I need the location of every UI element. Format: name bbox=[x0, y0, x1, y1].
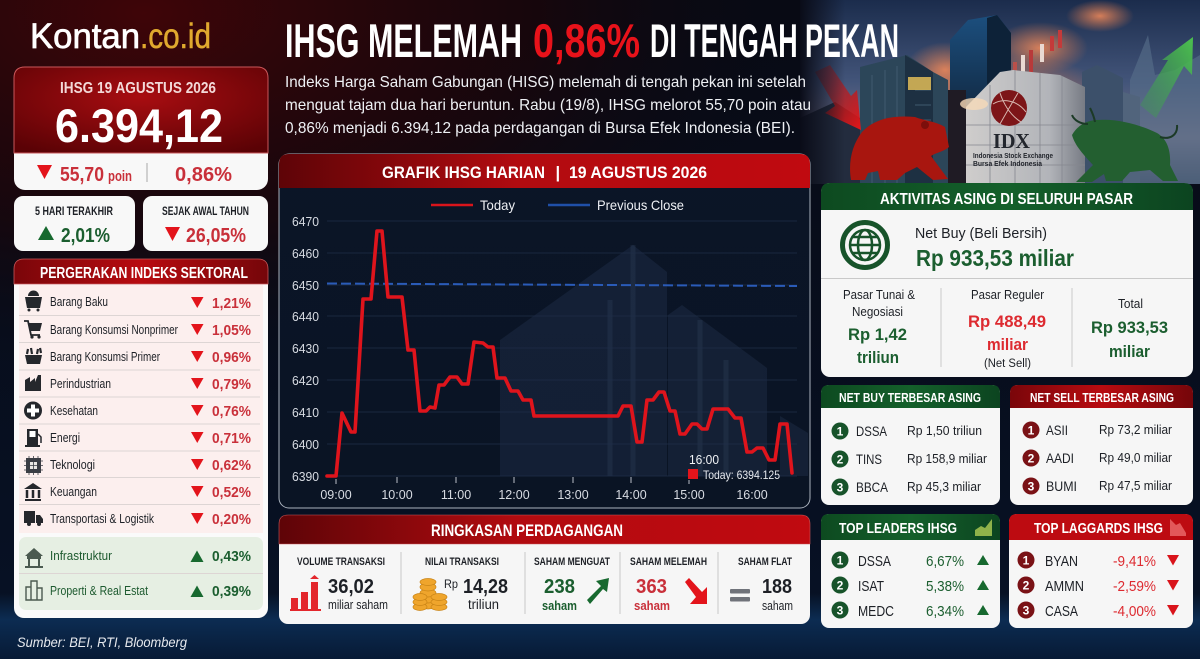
row 1: DSSA: DSSA bbox=[856, 423, 888, 439]
pasar tunai dan negosiasi: Rp 1,42 bbox=[848, 325, 907, 344]
row 1: ASII bbox=[1022, 422, 1173, 438]
saham menguat bbox=[534, 556, 610, 613]
row 1: DSSA: 1 bbox=[837, 424, 844, 438]
tower bbox=[950, 15, 1011, 130]
IDX globe bbox=[991, 90, 1027, 126]
chart tooltip bbox=[688, 452, 780, 482]
row 3: BBCA: Rp 45,3 miliar bbox=[907, 479, 982, 494]
title bbox=[285, 14, 899, 67]
row 3: CASA: 3 bbox=[1023, 604, 1030, 618]
pasar reguler: miliar bbox=[987, 335, 1028, 354]
saham flat bbox=[730, 556, 793, 613]
saham melemah bbox=[630, 556, 707, 613]
bear bbox=[850, 116, 949, 180]
x axis: 10:00 bbox=[381, 488, 413, 502]
row 3: BUMI: BUMI bbox=[1046, 478, 1077, 494]
row 2: TINS: Rp 158,9 miliar bbox=[907, 451, 988, 466]
IDX wordmark: Indonesia Stock Exchange bbox=[973, 151, 1053, 160]
total bbox=[1091, 297, 1168, 361]
nilai transaksi bbox=[413, 556, 508, 612]
icon: rising chart bbox=[975, 519, 992, 536]
row: keuangan bbox=[24, 483, 251, 501]
row: kesehatan bbox=[24, 402, 251, 420]
row 1: DSSA bbox=[832, 552, 989, 570]
row: teknologi: Teknologi bbox=[50, 458, 95, 472]
row: barang konsumsi nonprimer: 1,05% bbox=[212, 323, 251, 339]
row: perindustrian bbox=[25, 375, 251, 393]
panel: net buy terbesar asing bbox=[821, 385, 1000, 505]
volume transaksi: 36,02 bbox=[328, 576, 374, 598]
chart tooltip: 16:00 bbox=[689, 452, 719, 467]
row 1: BYAN: 1 bbox=[1023, 554, 1030, 568]
row: perindustrian: 0,79% bbox=[212, 377, 251, 393]
row 2: ISAT bbox=[832, 576, 989, 595]
panel: top laggards IHSG: TOP LAGGARDS IHSG bbox=[1034, 521, 1163, 537]
intro paragraph: 0,86% menjadi 6.394,12 pada perdagangan di Bursa Efek Indonesia (BEI). bbox=[285, 120, 795, 137]
panel: sejak awal tahun: 26,05% bbox=[186, 225, 246, 247]
net buy headline: Rp 933,53 miliar bbox=[916, 245, 1074, 271]
row 3: MEDC bbox=[832, 602, 989, 620]
row 2: AMMN: -2,59% bbox=[1113, 578, 1156, 595]
row: kesehatan: Kesehatan bbox=[50, 404, 98, 418]
pasar tunai dan negosiasi: Negosiasi bbox=[852, 305, 903, 319]
volume transaksi bbox=[290, 556, 388, 612]
title: DI TENGAH PEKAN bbox=[650, 14, 899, 67]
saham flat: saham bbox=[762, 598, 793, 613]
nilai transaksi: Rp bbox=[444, 579, 458, 591]
pasar tunai dan negosiasi: triliun bbox=[857, 348, 899, 367]
saham melemah: SAHAM MELEMAH bbox=[630, 556, 707, 568]
panel: sejak awal tahun: SEJAK AWAL TAHUN bbox=[162, 206, 249, 218]
pasar tunai dan negosiasi: Pasar Tunai & bbox=[843, 288, 916, 302]
previous close line bbox=[327, 284, 797, 286]
chart heading: | bbox=[556, 164, 560, 182]
today line bbox=[327, 231, 792, 476]
net buy headline bbox=[915, 225, 1074, 271]
row: teknologi: 0,62% bbox=[212, 458, 251, 474]
row 3: CASA: -4,00% bbox=[1113, 603, 1156, 620]
panel: top laggards IHSG bbox=[1009, 514, 1193, 628]
pasar reguler bbox=[968, 288, 1046, 370]
summary heading: RINGKASAN PERDAGANGAN bbox=[431, 521, 623, 540]
title: IHSG MELEMAH bbox=[285, 14, 522, 67]
row: transportasi dan logistik: Transportasi & Logistik bbox=[50, 512, 155, 526]
change in percent: 0,86% bbox=[175, 163, 232, 186]
x axis: 13:00 bbox=[557, 488, 589, 502]
saham flat: 188 bbox=[762, 576, 792, 598]
y axis and grid: 6430 bbox=[292, 341, 319, 356]
total: miliar bbox=[1109, 342, 1150, 361]
row 1: DSSA: Rp 1,50 triliun bbox=[907, 423, 982, 438]
row 2: AADI bbox=[1022, 450, 1173, 466]
row: barang konsumsi primer: Barang Konsumsi Primer bbox=[50, 350, 160, 364]
x axis: 16:00 bbox=[736, 488, 768, 502]
panel: top leaders IHSG bbox=[821, 514, 1000, 628]
row 1: DSSA: 1 bbox=[837, 554, 844, 568]
y axis and grid: 6450 bbox=[292, 278, 319, 293]
y axis and grid: 6420 bbox=[292, 373, 319, 388]
row: barang baku: Barang Baku bbox=[50, 295, 108, 309]
row 2: ISAT: 2 bbox=[837, 578, 844, 592]
index value: 6.394,12 bbox=[55, 99, 223, 152]
row: barang konsumsi primer bbox=[25, 348, 251, 366]
row: barang baku bbox=[25, 290, 251, 312]
intro paragraph: menguat tajam dua hari beruntun. Rabu (19/8), IHSG melorot 55,70 poin atau bbox=[285, 97, 811, 114]
row 2: ISAT: ISAT bbox=[858, 578, 884, 595]
saham melemah: 363 bbox=[636, 576, 667, 598]
panel: pergerakan indeks sektoral bbox=[14, 259, 268, 618]
row 1: BYAN bbox=[1018, 552, 1179, 570]
nilai transaksi: 14,28 bbox=[463, 576, 508, 598]
row: transportasi dan logistik bbox=[24, 511, 251, 528]
row 3: BBCA: 3 bbox=[837, 480, 844, 494]
candlesticks bbox=[1013, 30, 1062, 76]
left buildings bbox=[860, 55, 948, 184]
logo: Kontan.co.id: Kontan bbox=[30, 17, 140, 56]
watermark building bbox=[500, 245, 808, 476]
chart tooltip: Today: 6394.125 bbox=[703, 468, 780, 482]
row: infrastruktur: 0,43% bbox=[212, 549, 251, 565]
right building bbox=[1082, 65, 1123, 184]
row: properti dan real estat bbox=[26, 581, 251, 600]
row 1: DSSA: 6,67% bbox=[926, 553, 964, 570]
row: barang konsumsi nonprimer: Barang Konsumsi Nonprimer bbox=[50, 323, 178, 337]
chart heading bbox=[382, 164, 707, 182]
foreign heading: AKTIVITAS ASING DI SELURUH PASAR bbox=[880, 191, 1133, 208]
chart legend: Previous Close bbox=[597, 197, 684, 213]
row 2: TINS: TINS bbox=[856, 451, 882, 467]
row: barang konsumsi primer: 0,96% bbox=[212, 350, 251, 366]
row 2: TINS: 2 bbox=[837, 452, 844, 466]
y axis and grid bbox=[292, 214, 797, 484]
green up arrow bbox=[1140, 37, 1193, 118]
row 2: AMMN bbox=[1018, 576, 1179, 595]
row 3: MEDC: 3 bbox=[837, 604, 844, 618]
y axis and grid: 6390 bbox=[292, 469, 319, 484]
nilai transaksi: NILAI TRANSAKSI bbox=[425, 556, 499, 568]
row 2: AADI: Rp 49,0 miliar bbox=[1099, 450, 1173, 465]
saham flat: SAHAM FLAT bbox=[738, 556, 792, 568]
chart heading: GRAFIK IHSG HARIAN bbox=[382, 164, 545, 182]
red down arrow bbox=[815, 65, 861, 130]
row 2: AMMN: AMMN bbox=[1045, 578, 1084, 595]
volume transaksi: VOLUME TRANSAKSI bbox=[297, 556, 385, 568]
icon: globe bbox=[842, 222, 888, 268]
row 3: BUMI: 3 bbox=[1028, 480, 1035, 494]
total: Total bbox=[1118, 297, 1143, 311]
IDX wordmark: IDX bbox=[993, 129, 1030, 153]
change in points: 55,70 bbox=[60, 163, 104, 186]
x axis: 09:00 bbox=[320, 488, 352, 502]
row: properti dan real estat: Properti & Real Estat bbox=[50, 584, 148, 598]
row 3: MEDC: MEDC bbox=[858, 603, 894, 620]
row 1: ASII: ASII bbox=[1046, 422, 1068, 438]
panel: aktivitas asing di seluruh pasar bbox=[821, 183, 1193, 377]
row 2: TINS bbox=[832, 450, 988, 468]
row: keuangan: Keuangan bbox=[50, 485, 97, 499]
change in points: poin bbox=[108, 168, 132, 185]
row: keuangan: 0,52% bbox=[212, 485, 251, 501]
source note: Sumber: BEI, RTI, Bloomberg bbox=[17, 634, 187, 650]
panel: top leaders IHSG: TOP LEADERS IHSG bbox=[839, 521, 957, 537]
panel: net sell terbesar asing bbox=[1010, 385, 1193, 505]
saham melemah: saham bbox=[634, 598, 670, 613]
row 2: AADI: AADI bbox=[1046, 450, 1074, 466]
saham menguat: SAHAM MENGUAT bbox=[534, 556, 610, 568]
row 3: CASA bbox=[1018, 602, 1179, 620]
IDX building bbox=[966, 70, 1085, 184]
panel: 5 hari terakhir: 5 HARI TERAKHIR bbox=[35, 206, 114, 218]
row: transportasi dan logistik: 0,20% bbox=[212, 512, 251, 528]
chart legend bbox=[431, 197, 684, 213]
row 2: AMMN: 2 bbox=[1023, 578, 1030, 592]
pasar reguler: Pasar Reguler bbox=[971, 288, 1044, 302]
row: teknologi bbox=[24, 456, 251, 475]
intro paragraph: Indeks Harga Saham Gabungan (HISG) melemah di tengah pekan ini setelah bbox=[285, 74, 806, 91]
panel: grafik IHSG harian bbox=[279, 154, 810, 508]
net buy headline: Net Buy (Beli Bersih) bbox=[915, 225, 1047, 242]
panel heading: PERGERAKAN INDEKS SEKTORAL bbox=[40, 265, 248, 282]
total: Rp 933,53 bbox=[1091, 318, 1168, 337]
x axis: 12:00 bbox=[498, 488, 530, 502]
icon: falling chart bbox=[1170, 519, 1186, 536]
volume transaksi: miliar saham bbox=[328, 598, 388, 612]
panel: 5 hari terakhir: 2,01% bbox=[61, 225, 110, 247]
intro paragraph bbox=[285, 74, 811, 137]
IDX wordmark: Bursa Efek Indonesia bbox=[973, 159, 1043, 168]
card heading: IHSG 19 AGUSTUS 2026 bbox=[60, 80, 216, 97]
saham menguat: 238 bbox=[544, 576, 575, 598]
row 3: CASA: CASA bbox=[1045, 603, 1078, 620]
row 1: ASII: 1 bbox=[1028, 424, 1035, 438]
y axis and grid: 6410 bbox=[292, 405, 319, 420]
row 1: BYAN: -9,41% bbox=[1113, 553, 1156, 570]
panel: net buy terbesar asing: NET BUY TERBESAR ASING bbox=[839, 390, 981, 405]
row 3: MEDC: 6,34% bbox=[926, 603, 964, 620]
IDX wordmark bbox=[973, 129, 1053, 168]
row 2: ISAT: 5,38% bbox=[926, 578, 964, 595]
pasar reguler: (Net Sell) bbox=[984, 358, 1031, 370]
panel: ringkasan perdagangan bbox=[279, 515, 810, 624]
row 3: BBCA: BBCA bbox=[856, 479, 889, 495]
chart legend: Today bbox=[480, 197, 515, 213]
row 1: DSSA bbox=[832, 422, 982, 440]
row 3: BUMI: Rp 47,5 miliar bbox=[1099, 478, 1173, 493]
panel: sejak awal tahun bbox=[143, 196, 268, 251]
row: energi: 0,71% bbox=[212, 431, 251, 447]
row: infrastruktur: Infrastruktur bbox=[50, 549, 112, 563]
pasar tunai dan negosiasi bbox=[843, 288, 916, 367]
hero illustration: IDX building, bear and bull bbox=[800, 0, 1200, 184]
pasar reguler: Rp 488,49 bbox=[968, 312, 1046, 331]
x axis: 15:00 bbox=[673, 488, 705, 502]
row 1: BYAN: BYAN bbox=[1045, 553, 1078, 570]
y axis and grid: 6460 bbox=[292, 246, 319, 261]
chart heading: 19 AGUSTUS 2026 bbox=[569, 164, 707, 182]
row: properti dan real estat: 0,39% bbox=[212, 584, 251, 600]
row: infrastruktur bbox=[25, 548, 251, 567]
x axis: 14:00 bbox=[615, 488, 647, 502]
x axis: 11:00 bbox=[441, 488, 471, 502]
nilai transaksi: triliun bbox=[468, 597, 499, 612]
row 2: AADI: 2 bbox=[1028, 452, 1035, 466]
y axis and grid: 6440 bbox=[292, 309, 319, 324]
x axis bbox=[320, 477, 768, 502]
logo: Kontan.co.id: .co.id bbox=[140, 17, 211, 56]
logo: Kontan.co.id bbox=[30, 17, 211, 56]
row: kesehatan: 0,76% bbox=[212, 404, 251, 420]
row 3: BBCA bbox=[832, 478, 982, 496]
row 1: DSSA: DSSA bbox=[858, 553, 891, 570]
saham menguat: saham bbox=[542, 598, 577, 613]
row: perindustrian: Perindustrian bbox=[50, 377, 111, 391]
row 3: BUMI bbox=[1022, 478, 1173, 494]
row: barang baku: 1,21% bbox=[212, 296, 251, 312]
panel: 5 hari terakhir bbox=[14, 196, 135, 251]
bull bbox=[1072, 108, 1178, 182]
row 1: ASII: Rp 73,2 miliar bbox=[1099, 422, 1173, 437]
row: barang konsumsi nonprimer bbox=[24, 321, 251, 339]
y axis and grid: 6400 bbox=[292, 437, 319, 452]
title: 0,86% bbox=[533, 14, 640, 67]
y axis and grid: 6470 bbox=[292, 214, 319, 229]
row: energi bbox=[25, 429, 251, 447]
change in points bbox=[37, 163, 132, 186]
row: energi: Energi bbox=[50, 431, 80, 445]
panel: IHSG value card bbox=[14, 67, 268, 190]
